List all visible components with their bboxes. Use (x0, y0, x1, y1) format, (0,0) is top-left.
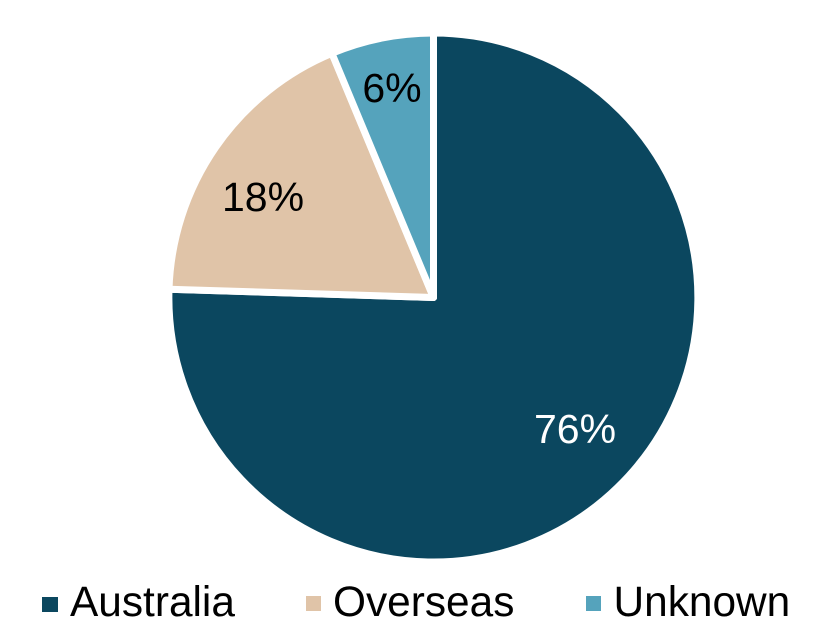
legend marker: Overseas (306, 596, 321, 611)
pie chart (169, 33, 698, 562)
slice: Unknown 6% (332, 33, 434, 298)
legend label: Overseas: Overseas (333, 578, 514, 625)
legend marker: Unknown (586, 596, 601, 611)
label: 6%: 6% (362, 65, 422, 111)
label: 76%: 76% (534, 406, 616, 452)
slice: Overseas 18% (169, 53, 434, 297)
slice: Australia 76% (169, 33, 698, 562)
legend marker: Australia (42, 597, 58, 612)
legend label: Australia: Australia (70, 578, 235, 625)
legend label: Unknown: Unknown (614, 578, 790, 625)
legend (42, 578, 790, 625)
label: 18%: 18% (222, 174, 304, 220)
